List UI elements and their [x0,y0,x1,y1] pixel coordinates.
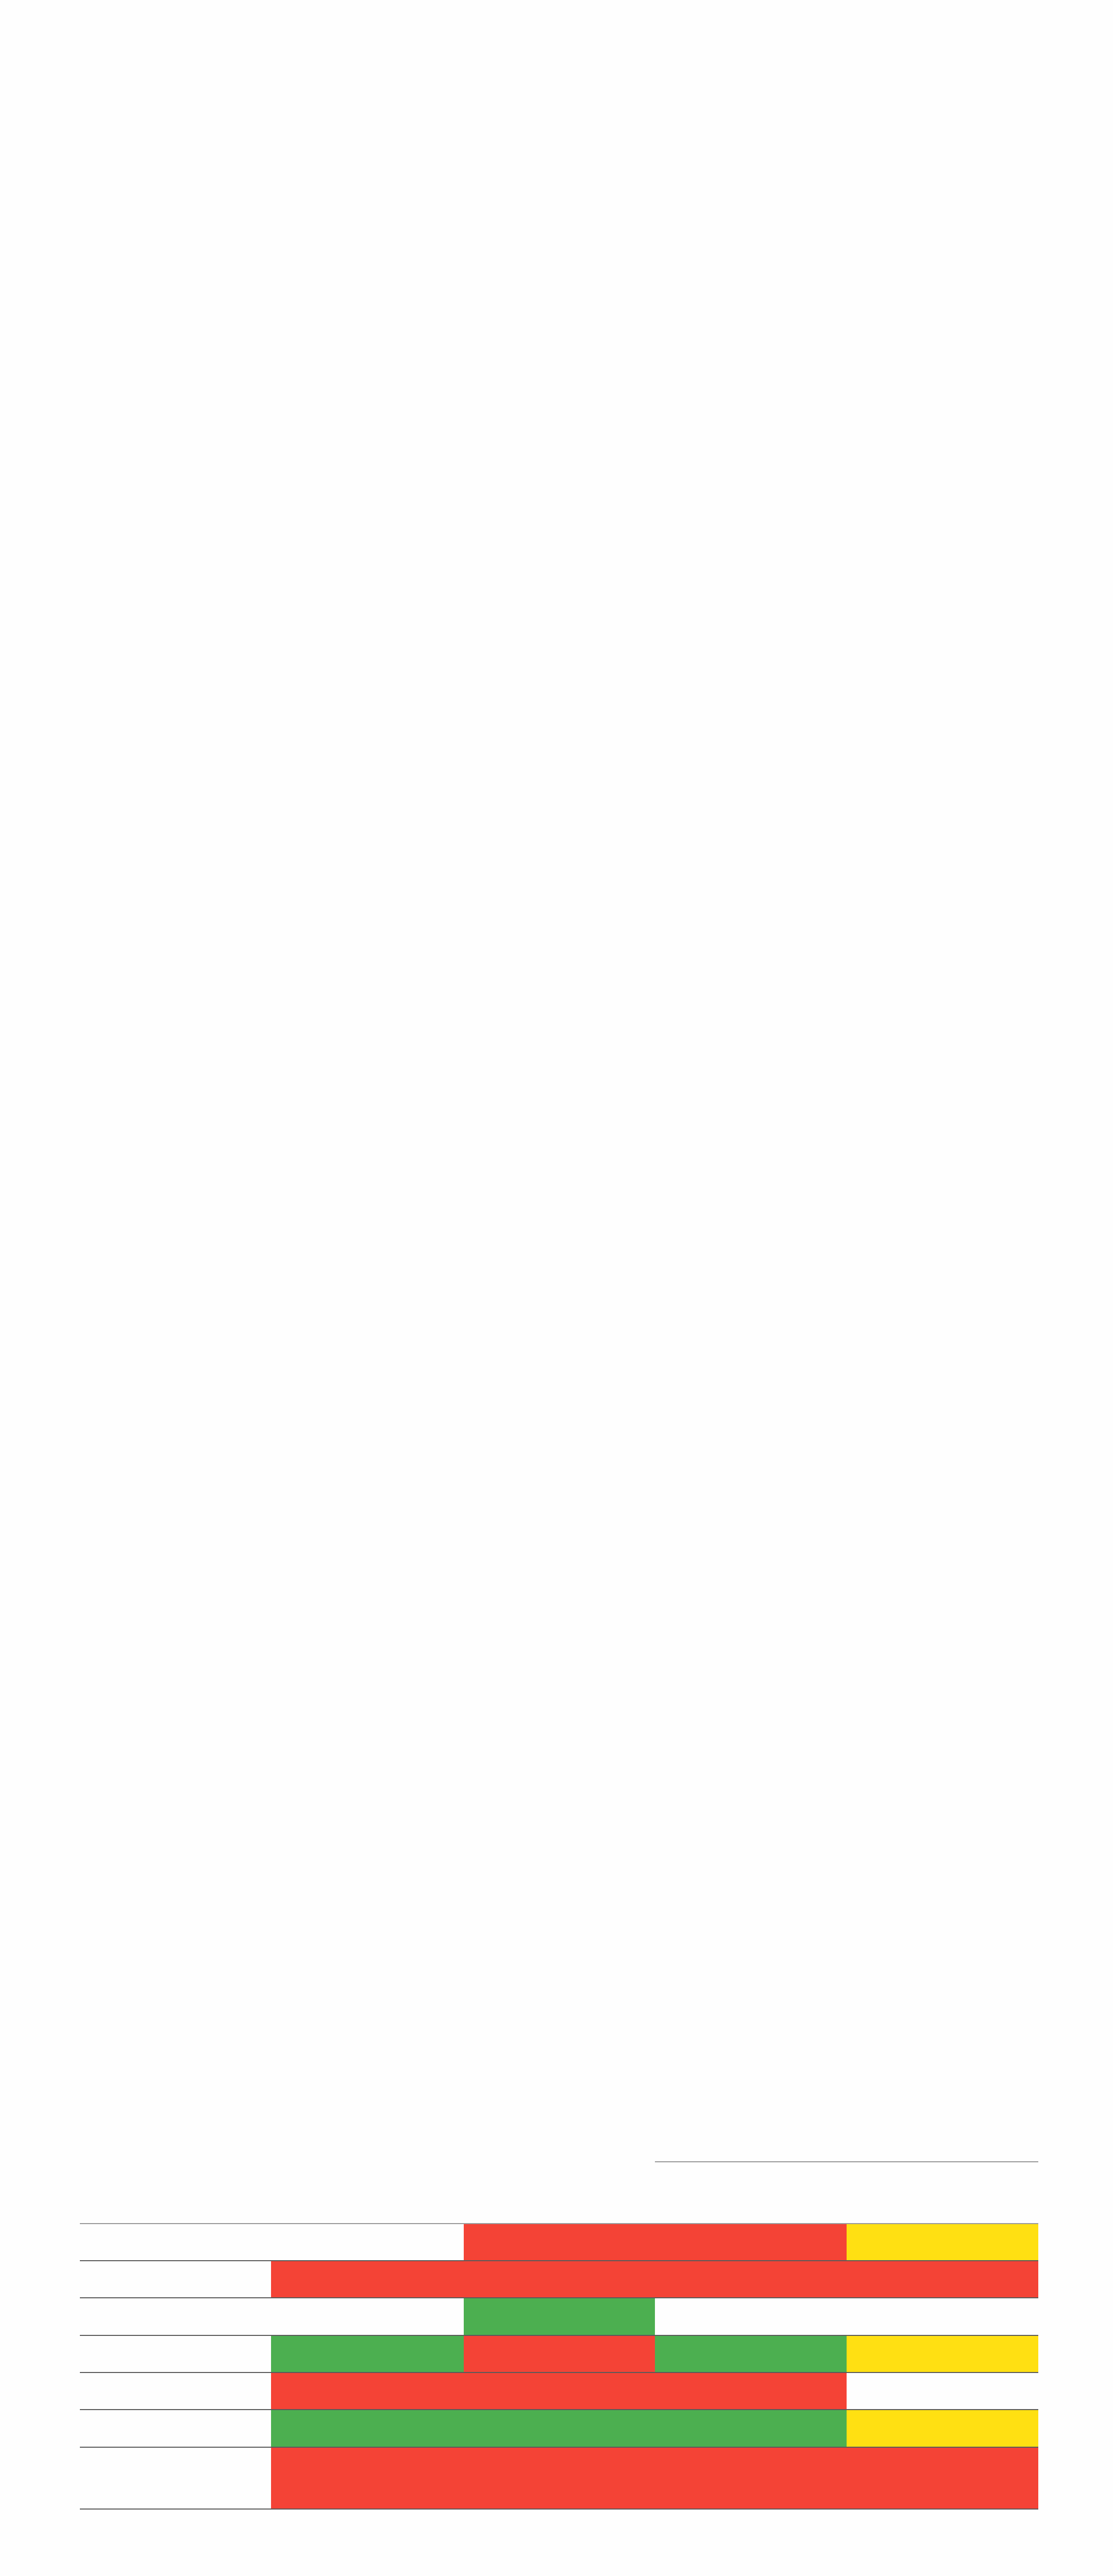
row 4 [271,2336,1038,2372]
row 3 [464,2298,655,2335]
row 2 [271,2261,1038,2297]
row 5 [271,2373,847,2409]
row 6 [271,2410,1038,2447]
header rule [655,2161,1038,2162]
row 1 [464,2224,1038,2260]
panel: table 1 [80,2161,1038,2510]
row 7 [271,2448,1038,2509]
